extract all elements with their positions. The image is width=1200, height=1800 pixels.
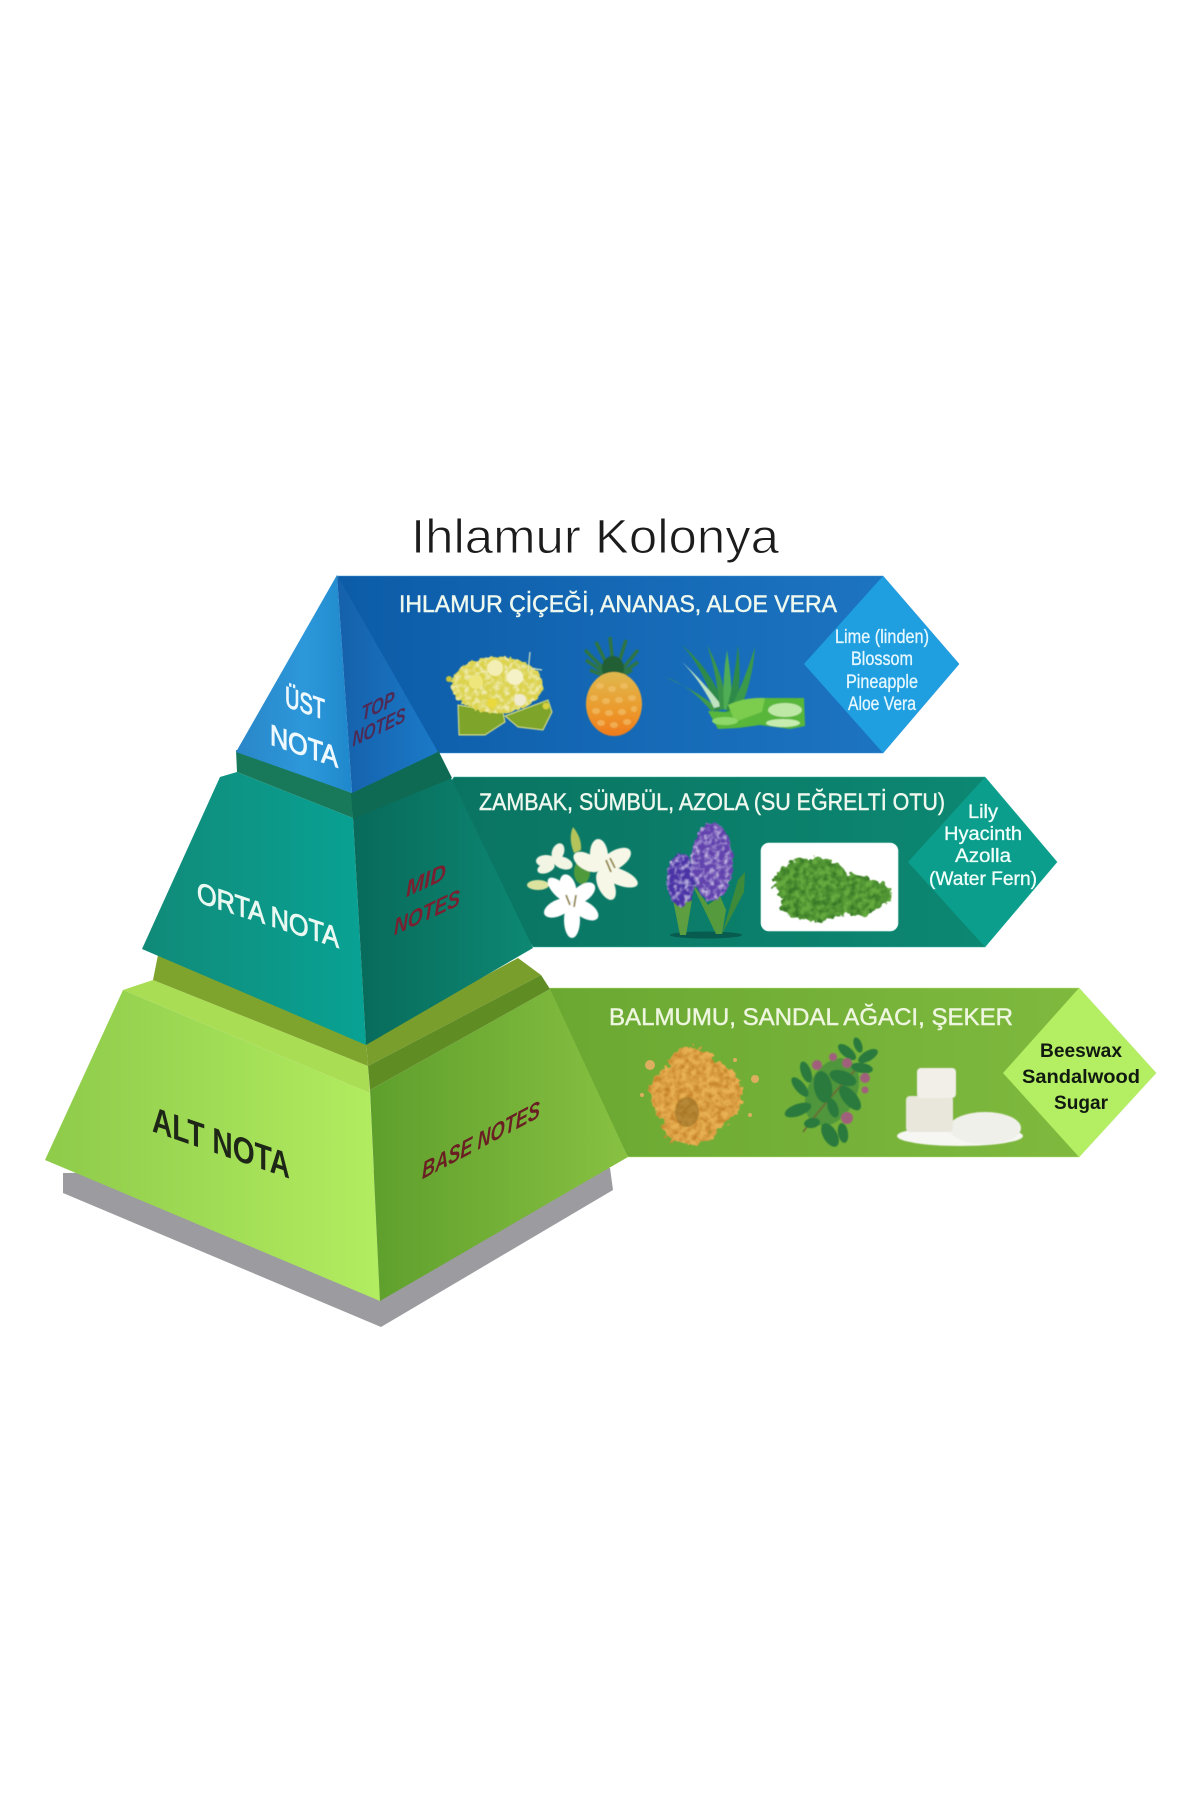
pyramid tier: top notes — [236, 575, 438, 793]
pyramid tier: base notes — [45, 950, 628, 1301]
icon: hyacinth — [667, 823, 745, 938]
base notes hexagon — [1003, 988, 1156, 1157]
base collar right — [366, 958, 541, 1066]
top notes hexagon — [804, 576, 959, 753]
mid notes hexagon: Hyacinth — [944, 824, 1022, 845]
ust nota label: ÜST — [285, 681, 325, 727]
mid notes hexagon: Lily — [968, 802, 999, 823]
mid notes banner — [445, 777, 1057, 947]
base collar left — [153, 950, 368, 1066]
icon: sandalwood — [783, 1036, 880, 1150]
icon: lily — [527, 827, 641, 938]
icon: pineapple — [585, 637, 642, 736]
mid notes label: MID — [406, 859, 446, 903]
icon: sugar — [897, 1068, 1023, 1146]
top notes heading: IHLAMUR ÇİÇEĞİ, ANANAS, ALOE VERA — [399, 591, 837, 618]
icon: linden blossom — [446, 652, 552, 735]
alt nota label: ALT NOTA — [152, 1098, 290, 1187]
base notes hexagon: Sandalwood — [1022, 1067, 1140, 1088]
top notes banner — [338, 576, 959, 753]
orta nota label: ORTA NOTA — [197, 877, 339, 955]
top notes hexagon: Lime (linden) — [835, 627, 929, 648]
base notes banner — [545, 988, 1156, 1157]
mid notes hexagon — [908, 777, 1057, 947]
base notes hexagon: Beeswax — [1040, 1041, 1122, 1062]
mid collar right — [351, 750, 452, 819]
pyramid base plinth — [63, 1168, 613, 1327]
top notes hexagon: Aloe Vera — [848, 694, 916, 715]
pyramid tier: mid notes — [142, 750, 533, 1045]
base notes label: BASE NOTES — [422, 1096, 540, 1185]
top notes hexagon: Blossom — [851, 649, 913, 670]
icon: azolla moss card — [761, 843, 898, 931]
base notes hexagon: Sugar — [1054, 1093, 1109, 1114]
mid collar left — [236, 750, 353, 818]
mid notes heading: ZAMBAK, SÜMBÜL, AZOLA (SU EĞRELTİ OTU) — [479, 789, 945, 816]
mid notes label line two: NOTES — [394, 885, 460, 941]
mid notes hexagon: Azolla — [955, 846, 1011, 867]
top notes hexagon: Pineapple — [846, 672, 918, 693]
top notes label line two: NOTES — [352, 702, 406, 752]
base collar right dark band — [368, 975, 550, 1090]
mid notes hexagon: (Water Fern) — [929, 869, 1037, 890]
title: Ihlamur Kolonya — [411, 511, 779, 564]
nota label: NOTA — [270, 719, 338, 775]
top notes label: TOP — [362, 686, 395, 726]
icon: aloe vera — [665, 645, 805, 729]
icon: beeswax — [640, 1047, 759, 1144]
base notes heading: BALMUMU, SANDAL AĞACI, ŞEKER — [609, 1004, 1013, 1031]
